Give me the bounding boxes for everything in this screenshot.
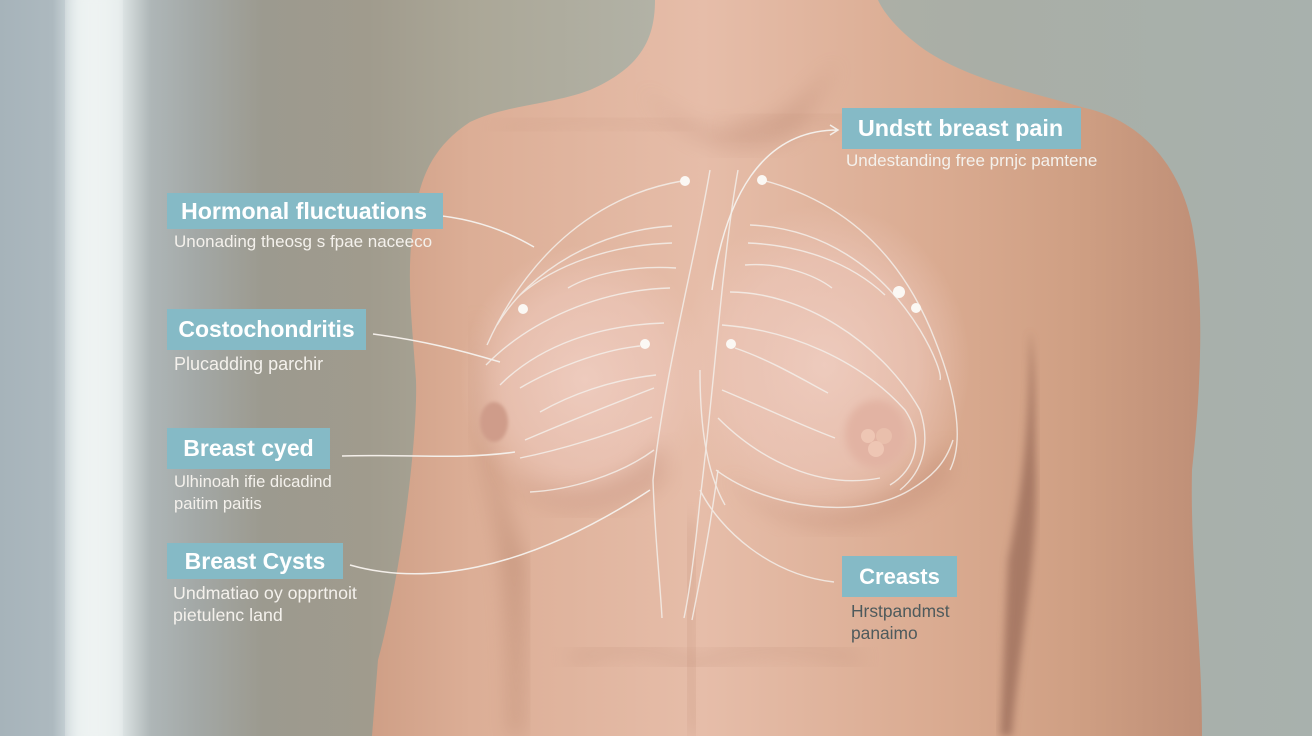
heading label: creasts: Creasts [859, 564, 940, 588]
heading label: breast cysts [167, 543, 343, 579]
text block: breast cyed caption: Ulhinoah ifie dicadind [174, 472, 332, 491]
connector: breast cysts [350, 490, 650, 574]
right arm gap shading [1000, 330, 1036, 736]
heading label: hormonal fluctuations [167, 193, 443, 229]
text block: breast cyed caption: paitim paitis [174, 494, 262, 513]
right chest tone [680, 205, 970, 525]
connector: hormonal fluctuations [432, 215, 534, 247]
torso silhouette [372, 0, 1202, 736]
connector: costochondritis [373, 334, 500, 362]
lower chest shadow: left [490, 440, 665, 511]
heading label: hormonal fluctuations: Hormonal fluctuations [181, 198, 427, 224]
abdomen shading [688, 520, 695, 736]
text block: breast cysts caption [173, 583, 357, 625]
tone markers [480, 402, 508, 442]
heading label: upper right [842, 108, 1081, 149]
neck and collarbone shading [640, 60, 840, 149]
heading label: costochondritis: Costochondritis [178, 316, 355, 342]
heading label: breast cysts: Breast Cysts [185, 548, 325, 574]
heading label: breast cyed: Breast cyed [183, 435, 314, 461]
connector: breast cyed [342, 452, 515, 456]
lower chest shadow: right [725, 440, 950, 528]
text block: costochondritis caption: Plucadding parchir [174, 354, 323, 374]
connector: upper right label arrow [712, 125, 838, 290]
text block: creasts caption [851, 601, 950, 643]
text block: breast cyed caption [174, 472, 332, 513]
anatomical line overlay [486, 170, 957, 620]
left chest tone [460, 245, 710, 515]
left arm gap shading [474, 310, 525, 736]
marker dots [518, 175, 921, 349]
text block: creasts caption: panaimo [851, 623, 918, 643]
text block: upper right caption: Undestanding free prnjc pamtene [846, 151, 1097, 170]
text block: breast cysts caption: Undmatiao oy opprtnoit [173, 583, 357, 603]
text block: breast cysts caption: pietulenc land [173, 605, 283, 625]
heading label: breast cyed [167, 428, 330, 469]
text block: hormonal caption: Unonading theosg s fpae naceeco [174, 232, 432, 251]
text block: creasts caption: Hrstpandmst [851, 601, 950, 621]
heading label: upper right: Undstt breast pain [858, 115, 1063, 141]
heading label: costochondritis [167, 309, 366, 350]
heading label: creasts [842, 556, 957, 597]
